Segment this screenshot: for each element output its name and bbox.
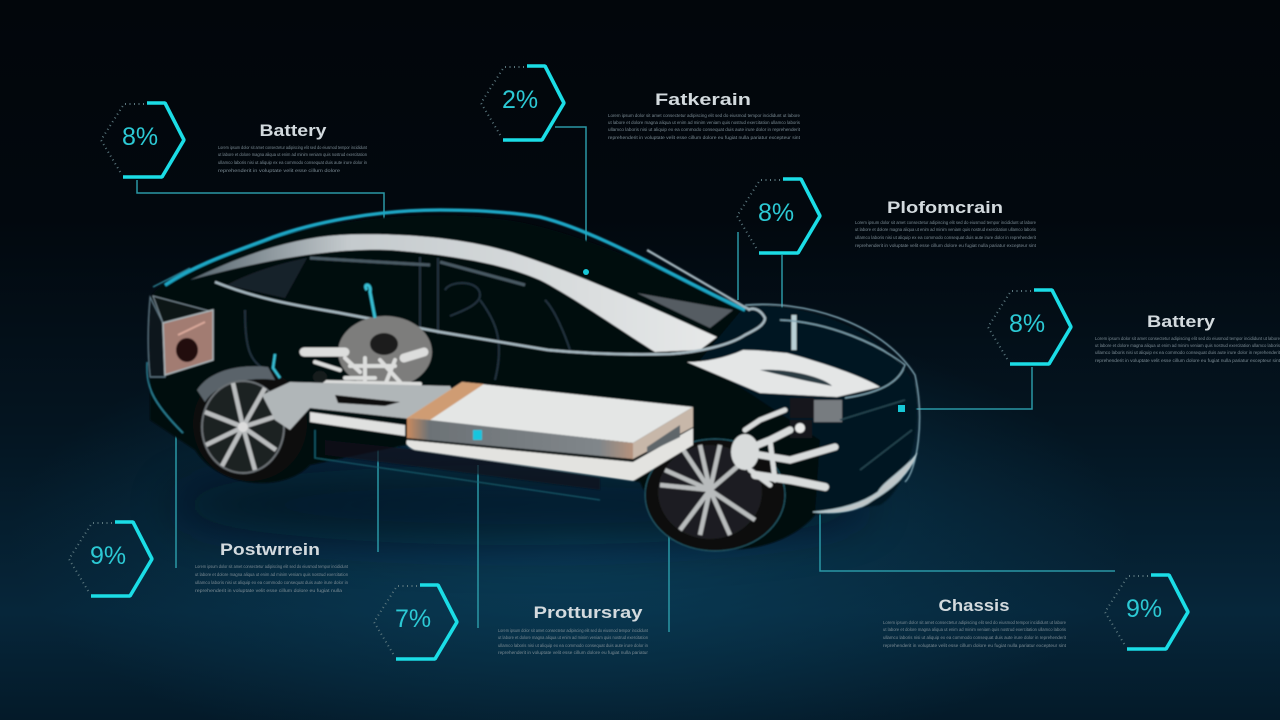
badge: 8% right <box>988 290 1071 364</box>
node dots <box>583 269 905 412</box>
text block: Prottursray description: ullamco laboris nisi ut aliquip ex ea commodo consequat duis aute irure dolor in <box>498 643 648 648</box>
text block: Chassis description: reprehenderit in voluptate velit esse cillum dolore eu fugiat nulla pariatur excepteur sint <box>883 643 1067 648</box>
heading: Battery right: Battery <box>1147 312 1216 331</box>
text block: Fatkerain description: Lorem ipsum dolor sit amet consectetur adipiscing elit sed do eiusmod tempor incididunt ut labore <box>608 113 800 118</box>
text block: Postwrrein description: reprehenderit in voluptate velit esse cillum dolore eu fugiat nulla <box>195 588 343 593</box>
text block: Postwrrein description: ut labore et dolore magna aliqua ut enim ad minim veniam quis nostrud exercitation <box>195 572 348 577</box>
cyan roof arc <box>165 210 745 310</box>
front mast <box>792 315 796 350</box>
front lower light <box>813 453 917 513</box>
front suspension <box>731 398 842 487</box>
text block: Plofomcrain description <box>855 220 1037 248</box>
badge: 7% bottom centre <box>374 585 457 659</box>
text block: Postwrrein description <box>195 564 349 593</box>
rear motor assembly <box>304 316 432 388</box>
front wheel <box>645 439 785 551</box>
heading: Fatkerain: Fatkerain <box>655 90 751 109</box>
text block: Battery description <box>218 145 368 173</box>
text block: Chassis description: ut labore et dolore magna aliqua ut enim ad minim veniam quis nostrud exercitation ullamco laboris <box>883 627 1067 632</box>
ground shadow <box>170 465 870 545</box>
text block: Chassis description: Lorem ipsum dolor sit amet consectetur adipiscing elit sed do eiusmod tempor incididunt ut labore <box>883 620 1066 625</box>
text block: Prottursray description: ut labore et dolore magna aliqua ut enim ad minim veniam quis nostrud exercitation <box>498 635 648 640</box>
text block: Fatkerain description <box>608 113 801 140</box>
text block: Battery description: ullamco laboris nisi ut aliquip ex ea commodo consequat duis aute irure dolor in <box>218 160 367 165</box>
heading: Chassis: Chassis <box>938 596 1010 615</box>
badge: 8% top left: 8% <box>122 123 158 151</box>
badge: 9% lower left <box>69 522 152 596</box>
text block: Battery description: Lorem ipsum dolor sit amet consectetur adipiscing elit sed do eiusmod tempor incididunt <box>218 145 368 150</box>
badge: 9% lower left: 9% <box>90 542 126 570</box>
text block: Plofomcrain description: ut labore et dolore magna aliqua ut enim ad minim veniam quis nostrud exercitation ullamco laboris <box>855 227 1037 232</box>
badge: 2% top centre: 2% <box>502 86 538 114</box>
heading: Postwrrein: Postwrrein <box>220 540 320 559</box>
leader lines <box>137 127 1115 632</box>
cyan sensor fragments <box>273 285 375 378</box>
text block: Plofomcrain description: Lorem ipsum dolor sit amet consectetur adipiscing elit sed do eiusmod tempor incididunt ut labore <box>855 220 1036 225</box>
front outline <box>745 304 920 482</box>
rear lamp <box>148 296 213 377</box>
car body silhouette <box>150 215 917 550</box>
front glass tint <box>700 306 917 515</box>
text block: Plofomcrain description: reprehenderit in voluptate velit esse cillum dolore eu fugiat nulla pariatur excepteur sint <box>855 243 1037 248</box>
rear outline <box>147 268 190 433</box>
badge: 9% bottom right: 9% <box>1126 595 1162 623</box>
text block: Battery right description: ullamco laboris nisi ut aliquip ex ea commodo consequat duis aute irure dolor in reprehenderit <box>1095 350 1280 355</box>
rear window glass <box>227 258 307 298</box>
badge: 8% right: 8% <box>1009 310 1045 338</box>
badge: 8% upper right: 8% <box>758 199 794 227</box>
belt line <box>215 282 765 354</box>
text block: Battery right description <box>1095 336 1280 363</box>
text block: Chassis description: ullamco laboris nisi ut aliquip ex ea commodo consequat duis aute irure dolor in reprehenderit <box>883 635 1067 640</box>
battery indicator dot <box>473 430 482 440</box>
badge: 8% upper right <box>737 179 820 253</box>
text block: Postwrrein description: ullamco laboris nisi ut aliquip ex ea commodo consequat duis aute irure dolor in <box>195 580 348 585</box>
text block: Battery description: reprehenderit in voluptate velit esse cillum dolore <box>218 168 341 173</box>
badge: 8% top left <box>101 103 184 177</box>
windshield <box>637 293 733 328</box>
text block: Prottursray description <box>498 628 649 655</box>
text block: Prottursray description: reprehenderit in voluptate velit esse cillum dolore eu fugiat nulla pariatur <box>498 650 649 655</box>
chassis floor rails <box>262 382 600 500</box>
hood panel <box>687 350 880 397</box>
battery pack <box>406 382 693 481</box>
text block: Battery description: ut labore et dolore magna aliqua ut enim ad minim veniam quis nostrud exercitation <box>218 152 367 157</box>
text block: Fatkerain description: reprehenderit in voluptate velit esse cillum dolore eu fugiat nulla pariatur excepteur sint <box>608 135 801 140</box>
heading: Plofomcrain: Plofomcrain <box>887 198 1003 217</box>
window pillars and seats <box>245 257 570 380</box>
badge: 9% bottom right <box>1105 575 1188 649</box>
car illustration <box>147 210 920 551</box>
rear wheel <box>193 366 307 481</box>
text block: Fatkerain description: ullamco laboris nisi ut aliquip ex ea commodo consequat duis aute irure dolor in reprehenderit <box>608 127 801 132</box>
badge: 2% top centre <box>481 66 564 140</box>
text block: Fatkerain description: ut labore et dolore magna aliqua ut enim ad minim veniam quis nostrud exercitation ullamco laboris <box>608 120 801 125</box>
heading: Battery: Battery <box>260 121 327 140</box>
white roof band <box>190 234 717 352</box>
text block: Battery right description: reprehenderit in voluptate velit esse cillum dolore eu fugiat nulla pariatur excepteur sint <box>1095 358 1280 363</box>
heading: Prottursray: Prottursray <box>534 603 643 622</box>
text block: Chassis description <box>883 620 1067 648</box>
badge: 7% bottom centre: 7% <box>395 605 431 633</box>
text block: Prottursray description: Lorem ipsum dolor sit amet consectetur adipiscing elit sed do eiusmod tempor incididunt <box>498 628 649 633</box>
text block: Plofomcrain description: ullamco laboris nisi ut aliquip ex ea commodo consequat duis aute irure dolor in reprehenderit <box>855 235 1037 240</box>
text block: Postwrrein description: Lorem ipsum dolor sit amet consectetur adipiscing elit sed do eiusmod tempor incididunt <box>195 564 349 569</box>
